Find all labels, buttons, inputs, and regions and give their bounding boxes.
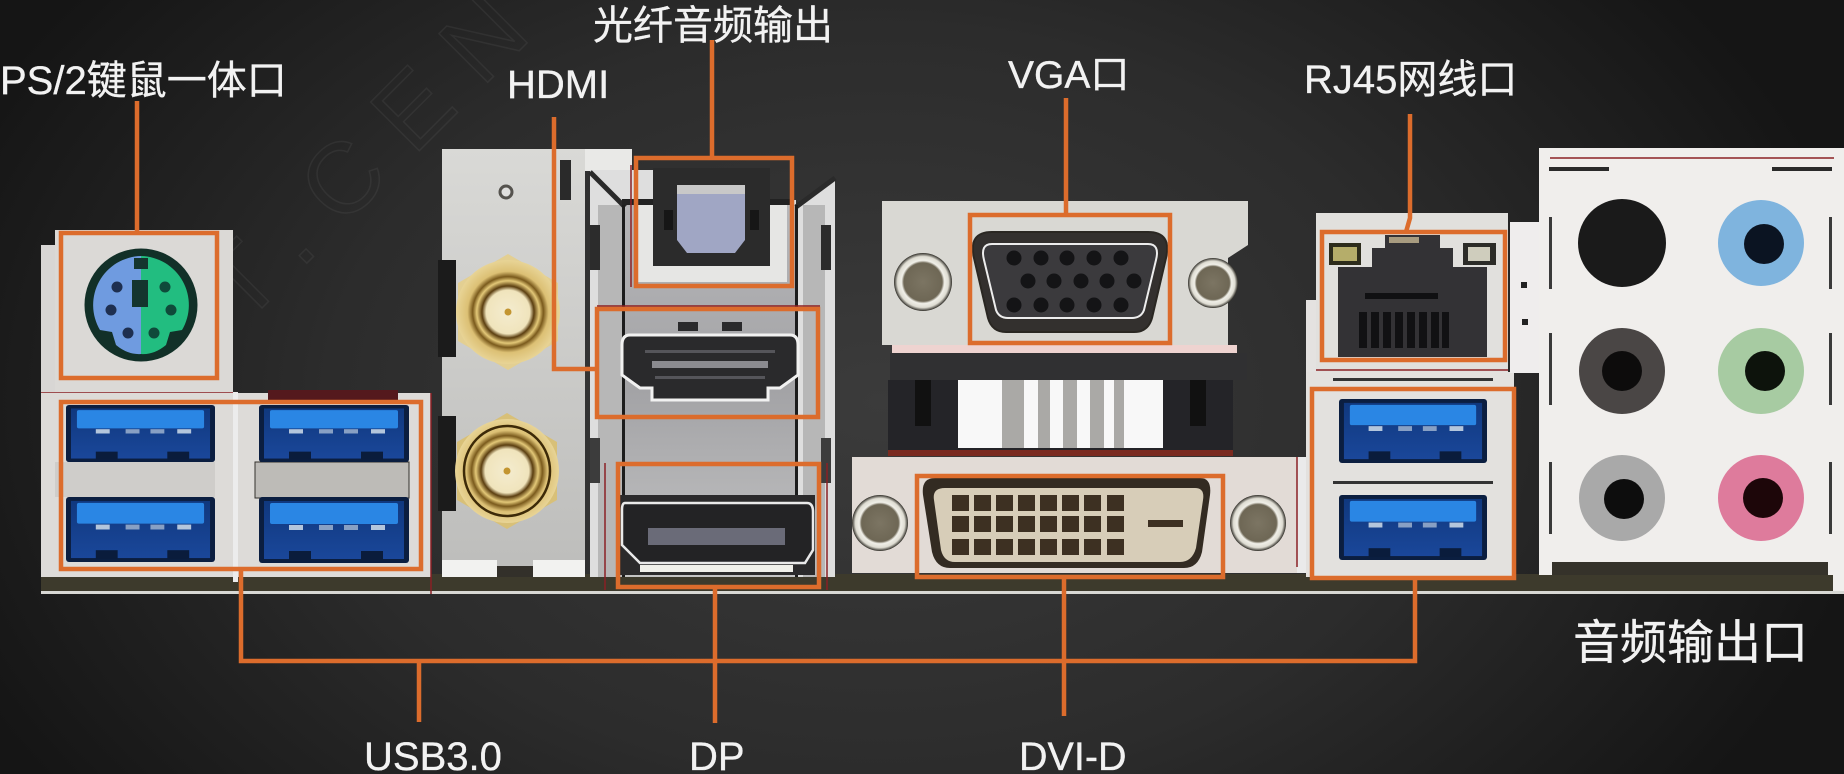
motherboard base strip	[41, 574, 1844, 594]
leader line: optical audio	[710, 40, 714, 158]
panel: antenna bracket	[438, 149, 632, 577]
icon: DVI connector	[923, 478, 1210, 568]
panel: DVI bracket	[852, 457, 1307, 573]
callout box: optical audio	[636, 158, 792, 286]
icon: VGA screw left	[894, 253, 952, 311]
label: optical audio output: 光纤音频输出	[593, 4, 833, 48]
leader line: RJ45	[1406, 114, 1410, 232]
label: HDMI: HDMI	[507, 63, 609, 107]
label: RJ45: RJ45网线口	[1304, 58, 1517, 102]
panel: left USB block	[41, 390, 431, 594]
leader line: DP	[713, 587, 717, 723]
icon: gold antenna connector top	[456, 254, 560, 370]
label: VGA: VGA口	[1008, 54, 1129, 97]
leader line: VGA	[1064, 98, 1068, 215]
icon: DVI screw right	[1230, 495, 1286, 551]
label: audio output: 音频输出口	[1573, 616, 1808, 669]
callout box: RJ45	[1322, 232, 1505, 360]
panel: audio jacks	[1539, 148, 1844, 594]
label: PS/2: PS/2键鼠一体口	[0, 59, 287, 103]
callout box: VGA	[970, 215, 1170, 343]
leader bracket: USB3.0	[241, 569, 1415, 722]
icon: screw hole	[500, 186, 512, 198]
icon: blue audio jack	[1718, 200, 1804, 286]
leader line: DVI-D	[1062, 577, 1066, 716]
icon: USB port top left	[66, 405, 215, 462]
leader line: PS/2	[135, 101, 139, 233]
icon: empty audio socket	[1578, 199, 1666, 287]
icon: gold antenna connector bottom	[455, 413, 559, 529]
leader line: HDMI	[554, 117, 597, 369]
panel: VGA bracket	[882, 201, 1248, 353]
callout box: DVI-D	[917, 476, 1223, 577]
callout box: DP	[618, 464, 819, 587]
icon: USB port right bottom	[1339, 495, 1487, 560]
panel: PS/2 port	[41, 230, 233, 395]
icon: USB port top right	[259, 405, 409, 462]
icon: VGA connector	[973, 232, 1167, 332]
callout box: right USB	[1312, 389, 1514, 578]
icon: RJ45 jack	[1329, 235, 1496, 357]
icon: DisplayPort	[620, 495, 815, 575]
icon: black audio jack	[1579, 328, 1665, 414]
icon: HDMI port	[622, 322, 798, 400]
icon: USB port bottom right	[259, 497, 409, 563]
icon: VGA screw right	[1188, 258, 1238, 308]
icon: USB port bottom left	[66, 497, 215, 562]
icon: USB port right top	[1339, 399, 1487, 463]
icon: DVI screw left	[852, 495, 908, 551]
callout box: HDMI	[597, 309, 818, 417]
panel: RJ45 and right USB block	[1306, 213, 1541, 577]
callout box: left USB	[61, 402, 421, 569]
icon: green audio jack	[1718, 328, 1804, 414]
callout box: PS/2	[61, 233, 217, 378]
icon: PS/2 socket	[84, 248, 198, 362]
panel: VGA DVI riser	[888, 353, 1247, 456]
panel: HDMI and DP bracket	[590, 165, 835, 590]
icon: pink audio jack	[1718, 455, 1804, 541]
icon: optical audio port	[653, 168, 770, 266]
icon: grey audio jack	[1579, 455, 1665, 541]
